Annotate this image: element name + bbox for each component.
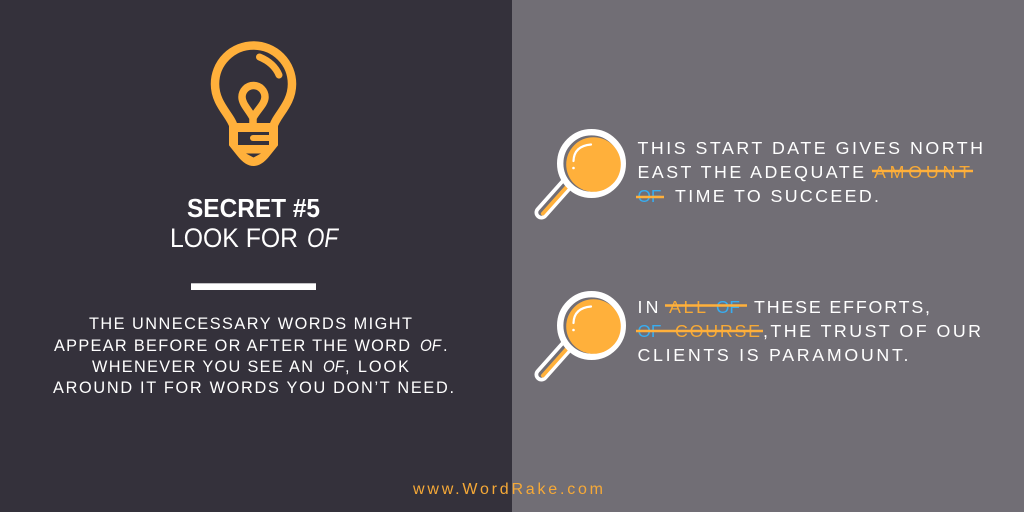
text block: example 1 — [636, 138, 983, 206]
icon: light bulb — [215, 46, 292, 165]
text block: example 1: TIME TO SUCCEED. — [675, 186, 879, 206]
text block: explanation: , LOOK — [345, 358, 409, 376]
icon: magnifying glass 1 — [542, 132, 623, 214]
text block: example 1: EAST THE ADEQUATE — [638, 162, 864, 182]
text block: example 1: THIS START DATE GIVES NORTH — [638, 138, 983, 158]
divider bar — [191, 283, 316, 290]
text block: example 2: ALL — [669, 297, 706, 317]
footer url: www.WordRake.com — [412, 481, 603, 498]
text block: example 2: OF — [638, 321, 662, 341]
text block: explanation: . — [443, 337, 448, 355]
text block: example 1: OF — [638, 186, 662, 206]
text block: example 1: AMOUNT — [874, 162, 970, 182]
text block: example 2: IN — [638, 297, 658, 317]
text block: explanation: AROUND IT FOR WORDS YOU DON’T NEED. — [53, 379, 454, 397]
text block: explanation: OF — [323, 358, 345, 376]
heading: look for of: OF — [307, 223, 339, 253]
text block: example 2 — [636, 297, 981, 365]
text block: explanation: WHENEVER YOU SEE AN — [92, 358, 313, 376]
text block: explanation: OF — [420, 337, 442, 355]
panel: left dark background — [0, 0, 512, 512]
text block: explanation — [53, 315, 454, 397]
text block: example 2: ,THE TRUST OF OUR — [763, 321, 981, 341]
icon: magnifying glass 2 — [542, 294, 623, 376]
text block: example 2: CLIENTS IS PARAMOUNT. — [638, 345, 908, 365]
text block: explanation: THE UNNECESSARY WORDS MIGHT — [89, 315, 412, 333]
text block: example 2: OF — [716, 297, 740, 317]
panel: right grey background — [512, 0, 1024, 512]
text block: example 2: COURSE — [675, 321, 760, 341]
text block: example 2: THESE EFFORTS, — [754, 297, 930, 317]
heading: secret number: SECRET #5 — [187, 193, 320, 223]
heading: look for of: LOOK FOR — [170, 223, 298, 253]
text block: explanation: APPEAR BEFORE OR AFTER THE WORD — [54, 337, 410, 355]
